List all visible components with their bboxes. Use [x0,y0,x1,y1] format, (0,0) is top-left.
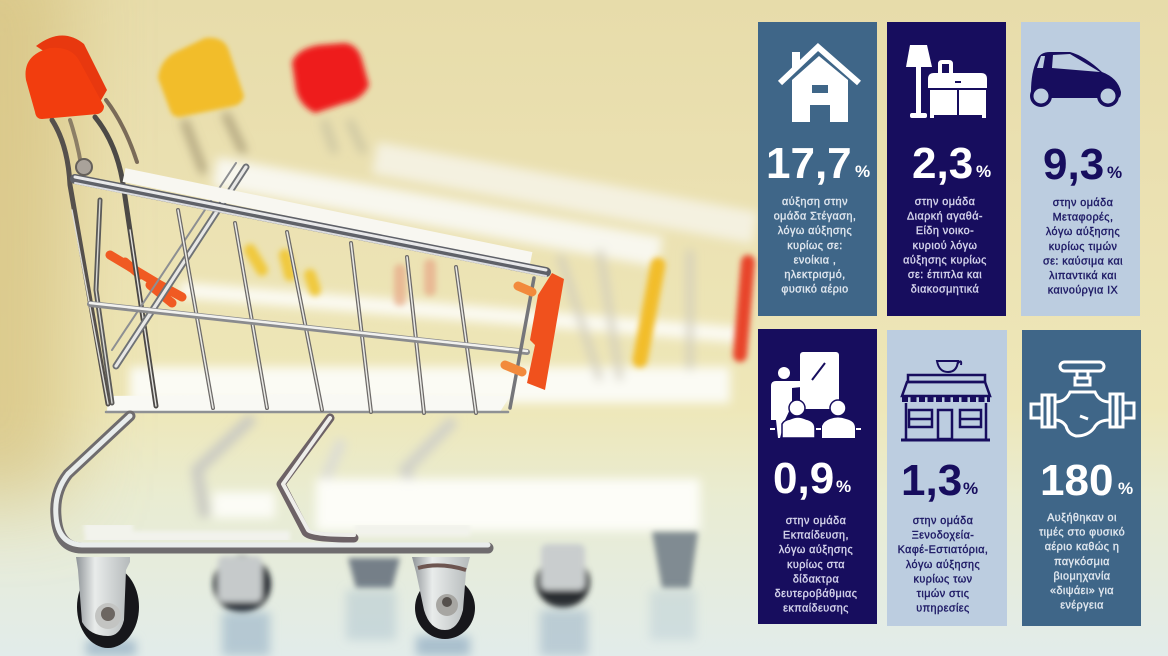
text: transport: στην ομάδα [1053,197,1113,209]
icon: teacher and students [770,352,861,438]
rear red handle [292,43,369,113]
text: education: δίδακτρα [793,573,839,585]
icon: gas pipe valve [1031,362,1134,436]
panel: education [758,329,877,624]
text: natural gas: Αυξήθηκαν οι [1047,512,1117,524]
stat: 2,3%: 2,3 [912,139,973,188]
orange seat clip [110,255,182,303]
text: hotels and cafes [898,515,988,615]
text: natural gas: αέριο καθώς η [1045,541,1119,553]
basket wires [178,210,476,413]
panel: hotels and cafes [887,330,1007,626]
rear orange and yellow clips [250,250,748,360]
rear handle arms [106,100,137,162]
rear yellow handle [158,38,244,117]
front handle arms [52,120,108,404]
stat: 1,3%: 1,3 [901,456,962,505]
text: durable goods: διακοσμητικά [911,284,979,296]
text: education: Εκπαίδευση, [783,530,849,542]
text: housing [774,196,856,296]
text: housing: ομάδα Στέγαση, [774,211,856,223]
text: education: στην ομάδα [786,515,846,527]
text: natural gas: «διψάει» για [1050,585,1114,597]
flip seat diagonal [116,167,246,366]
left front wheel [76,557,139,648]
text: hotels and cafes: Ξενοδοχεία- [912,530,974,542]
basket floor [107,394,510,412]
text: natural gas [1039,512,1125,612]
stat: 180%: % [1118,479,1133,498]
blurred wheels and reflections [213,532,698,613]
stat: 1,3%: % [963,479,978,498]
text: transport: καινούργια ΙΧ [1048,285,1118,297]
blurred rear carts [86,113,755,656]
text: hotels and cafes: στην ομάδα [913,515,973,527]
text: hotels and cafes: τιμών στις [917,588,969,600]
text: durable goods: Διαρκή αγαθά- [907,211,983,223]
panel: durable goods [887,22,1006,316]
text: education [775,515,857,615]
text: durable goods: κυριού λόγω [913,240,977,252]
text: hotels and cafes: λόγω αύξησης [906,559,980,571]
small orange clips [505,286,532,372]
text: transport: λιπαντικά και [1049,270,1117,282]
stat: 2,3%: % [976,162,991,181]
stat: 17,7%: 17,7 [766,139,852,188]
text: hotels and cafes: κυρίως των [914,573,972,585]
white top band [124,175,531,259]
right side wire [510,278,534,408]
stat: 17,7%: % [855,162,870,181]
text: natural gas: βιομηχανία [1054,570,1110,582]
stat: 0,9%: % [836,477,851,496]
icon: cafe storefront [901,361,990,440]
text: education: κυρίως στα [787,559,845,571]
panel: housing [758,22,877,316]
text: housing: αύξηση στην [782,196,848,208]
right orange clip [527,273,564,390]
text: transport [1043,197,1123,297]
text: durable goods [903,196,987,296]
front cart basket [52,100,546,413]
icon: lamp and cabinet [906,45,987,118]
text: durable goods: αύξησης κυρίως [903,254,987,266]
text: natural gas: τιμές στο φυσικό [1039,527,1125,539]
stat: 180%: 180 [1040,456,1113,505]
text: housing: ενοίκια , [794,254,836,266]
text: durable goods: Είδη νοικο- [916,225,974,237]
text: hotels and cafes: υπηρεσίες [916,603,970,615]
stat: 0,9%: 0,9 [773,454,834,503]
stat: 9,3%: % [1107,163,1122,182]
text: transport: λόγω αύξησης [1046,226,1120,238]
panel: transport [1021,22,1140,316]
text: transport: Μεταφορές, [1053,212,1113,224]
text: education: εκπαίδευσης [783,603,849,615]
middle rail [90,304,527,352]
text: housing: φυσικό αέριο [781,284,849,296]
left side frame [96,200,112,403]
text: durable goods: στην ομάδα [915,196,975,208]
stat: 9,3%: 9,3 [1043,140,1104,189]
text: transport: κυρίως τιμών [1049,241,1117,253]
cart lower frame [56,416,488,548]
top rail [75,179,546,272]
icon: car [1030,52,1121,107]
text: housing: κυρίως σε: [787,240,843,252]
text: education: δευτεροβάθμιας [775,588,857,600]
text: natural gas: ενέργεια [1060,600,1104,612]
text: education: λόγω αύξησης [779,544,853,556]
right front wheel [412,557,475,639]
text: hotels and cafes: Καφέ-Εστιατόρια, [898,544,988,556]
text: transport: σε: καύσιμα και [1043,255,1123,267]
icon: house [780,47,859,122]
text: housing: λόγω αύξησης [778,225,852,237]
panel: natural gas [1022,330,1141,626]
text: natural gas: παγκόσμια [1054,556,1110,568]
text: housing: ηλεκτρισμό, [784,269,846,281]
text: durable goods: σε: έπιπλα και [908,269,982,281]
front red handle [26,35,107,119]
